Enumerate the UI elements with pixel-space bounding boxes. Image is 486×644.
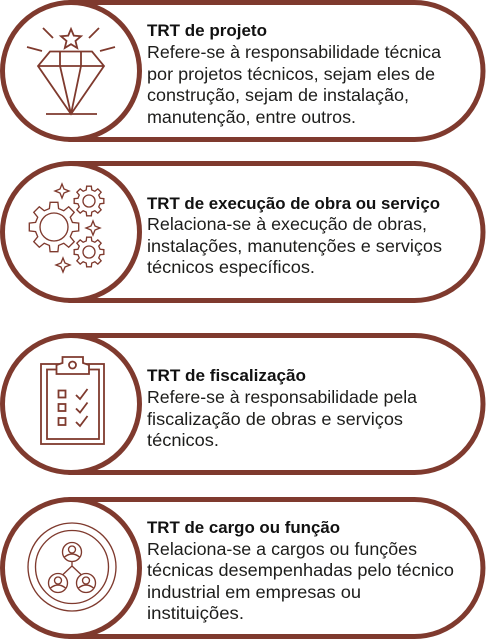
icon: gears and sparkles — [29, 184, 104, 272]
text: TRT de execução de obra ou serviço: técnicos específicos. — [147, 257, 315, 277]
icon circle — [2, 164, 140, 300]
panel: TRT de projeto — [2, 2, 483, 140]
text: TRT de cargo ou função: industrial em empresas ou — [147, 582, 361, 602]
icon: people hierarchy — [28, 523, 116, 611]
text: TRT de projeto: TRT de projeto — [147, 21, 267, 40]
text: TRT de fiscalização — [147, 366, 417, 450]
text: TRT de cargo ou função — [147, 518, 454, 623]
icon: clipboard checklist — [41, 357, 104, 444]
text: TRT de fiscalização: TRT de fiscalização — [147, 366, 306, 385]
text: TRT de fiscalização: fiscalização de obras e serviços — [147, 409, 403, 429]
text: TRT de fiscalização: técnicos. — [147, 430, 219, 450]
panel: TRT de fiscalização — [2, 336, 483, 472]
text: TRT de execução de obra ou serviço: TRT de execução de obra ou serviço — [147, 194, 440, 213]
text: TRT de fiscalização: Refere-se à responsabilidade pela — [147, 387, 417, 407]
icon circle — [2, 336, 140, 472]
icon circle — [2, 500, 140, 636]
text: TRT de cargo ou função: TRT de cargo ou função — [147, 518, 340, 537]
text: TRT de projeto: construção, sejam de instalação, — [147, 85, 409, 105]
text: TRT de projeto — [147, 21, 441, 127]
text: TRT de projeto: manutenção, entre outros. — [147, 107, 356, 127]
pill outline — [71, 2, 483, 140]
pill outline — [71, 500, 483, 636]
text: TRT de projeto: por projetos técnicos, sejam eles de — [147, 64, 435, 84]
text: TRT de execução de obra ou serviço — [147, 194, 442, 277]
pill outline — [71, 164, 483, 300]
text: TRT de cargo ou função: instituições. — [147, 603, 244, 623]
text: TRT de execução de obra ou serviço: Relaciona-se à execução de obras, — [147, 214, 427, 234]
text: TRT de projeto: Refere-se à responsabilidade técnica — [147, 42, 441, 62]
pill outline — [71, 336, 483, 472]
icon: diamond with star — [27, 28, 115, 114]
text: TRT de execução de obra ou serviço: instalações, manutenções e serviços — [147, 236, 442, 256]
panel: TRT de cargo ou função — [2, 500, 483, 636]
text: TRT de cargo ou função: técnicas desempenhadas pelo técnico — [147, 560, 454, 580]
icon circle — [2, 2, 140, 140]
text: TRT de cargo ou função: Relaciona-se a cargos ou funções — [147, 539, 417, 559]
panel: TRT de execução de obra ou serviço — [2, 164, 483, 300]
